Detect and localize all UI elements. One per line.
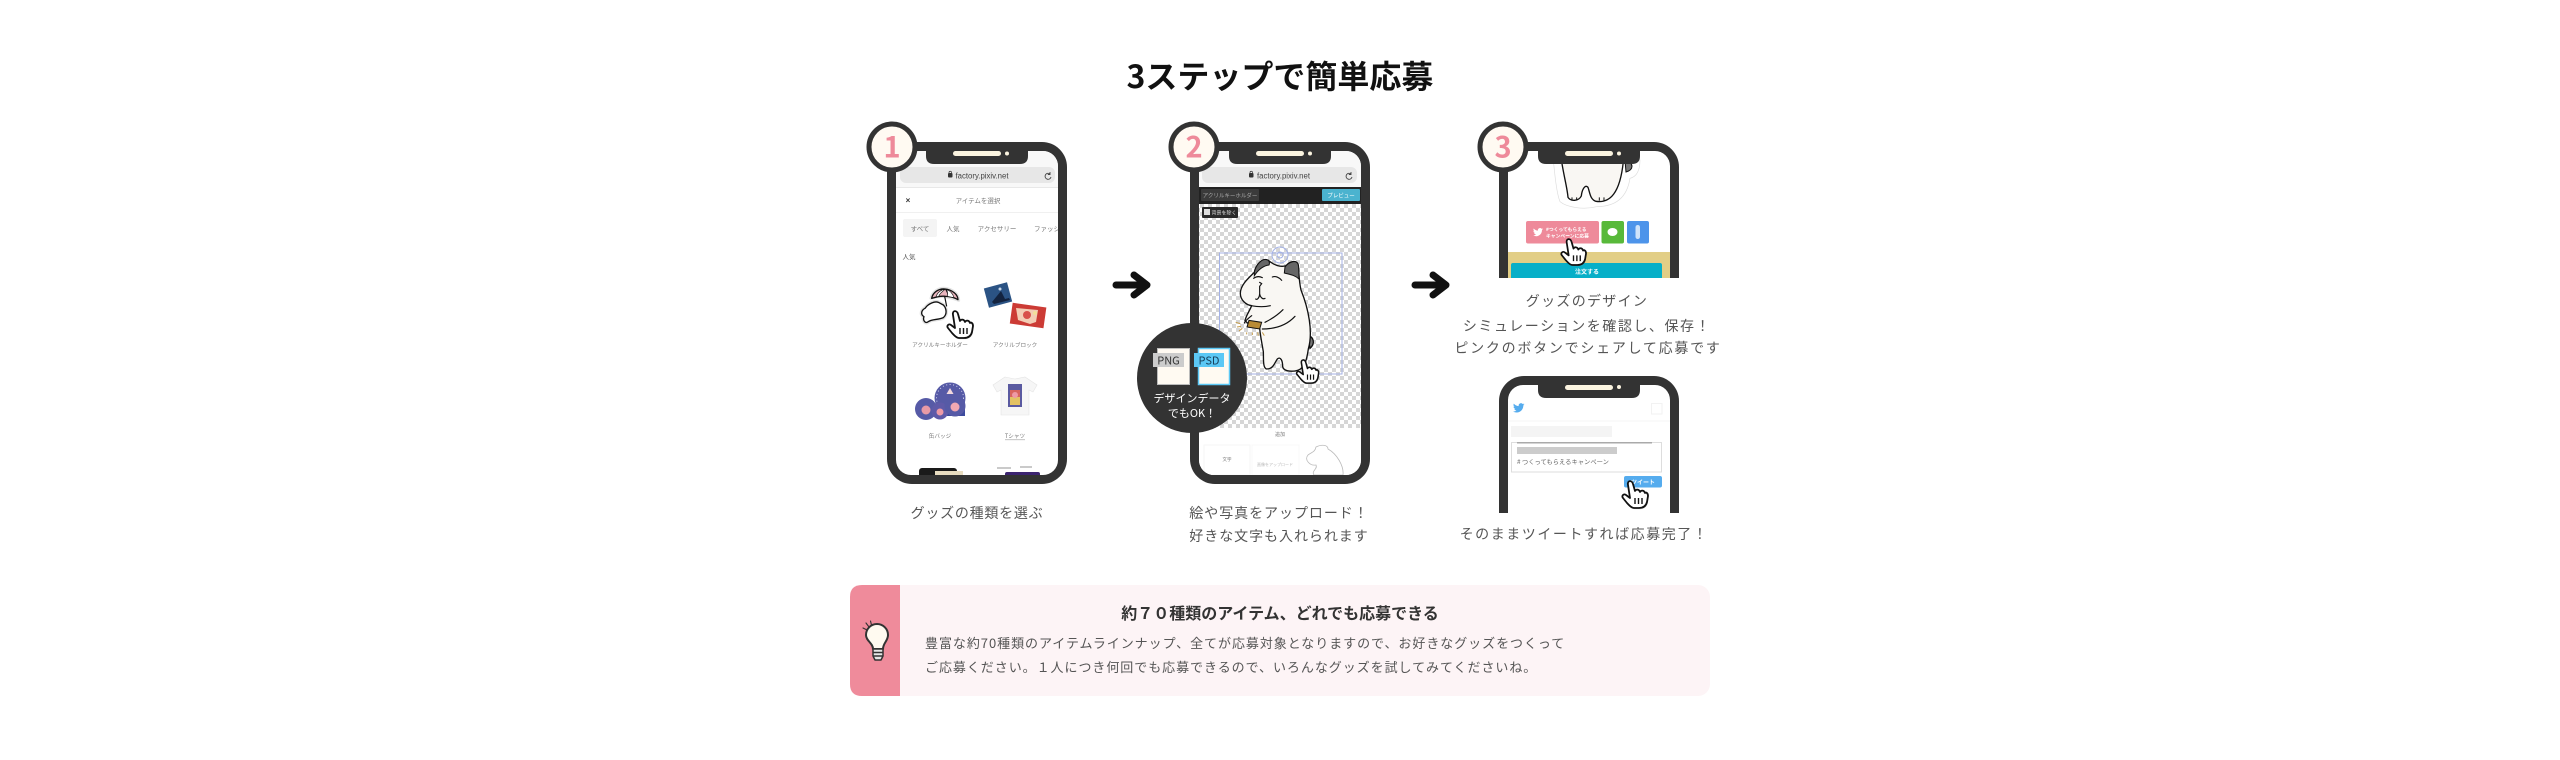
illustration: cat	[1236, 260, 1313, 371]
remove background toggle: 背景を除く	[1211, 210, 1237, 216]
order bar: 注文する	[1575, 267, 1599, 276]
caption 4: そのままツイートすれば応募完了！	[1460, 524, 1708, 544]
share buttons	[1526, 221, 1649, 244]
remove background toggle	[1202, 207, 1238, 218]
panel body: 豊富な約70種類のアイテムラインナップ、全てが応募対象となりますので、お好きなグッズをつくって	[925, 633, 1565, 652]
phone 2 screen content: factory.pixiv.net	[1257, 172, 1311, 180]
caption 2: 絵や写真をアップロード！	[1189, 503, 1369, 523]
caption 3: ピンクのボタンでシェアして応募です	[1454, 338, 1722, 358]
phone 1 screen content: 人気	[902, 251, 916, 261]
title: 3ステップで簡単応募	[1127, 52, 1433, 98]
tweet button: ツイート	[1631, 478, 1655, 486]
phone 1 screen content: アクセサリー	[978, 223, 1016, 233]
callout: design data OK	[1137, 323, 1247, 433]
phone 3: simulation and share	[1499, 142, 1679, 278]
sticker preview	[1553, 160, 1640, 208]
editor toolbar: アクリルキーホルダー	[1203, 192, 1257, 200]
tweet box	[1512, 442, 1662, 472]
caption 2	[1189, 503, 1369, 546]
step badge 3: 3	[1494, 124, 1512, 166]
share buttons: キャンペーンに応募	[1546, 232, 1589, 240]
phone 1 screen content	[896, 151, 1058, 475]
phone 1 screen content: アイテムを選択	[956, 195, 1001, 205]
step badge 3	[1480, 124, 1526, 170]
caption 3: シミュレーションを確認し、保存！	[1463, 316, 1711, 336]
icon: PNG file: PNG	[1157, 352, 1180, 368]
phone 4: tweet	[1499, 376, 1679, 513]
step badge 2	[1171, 124, 1217, 170]
step badge 1: 1	[883, 124, 901, 166]
caption 1: グッズの種類を選ぶ	[911, 503, 1043, 523]
phone 1 screen content: 缶バッジ	[929, 432, 952, 440]
item: phone case (cropped)	[919, 468, 963, 475]
phone 1 screen content: アクリルキーホルダー	[912, 341, 968, 349]
checkerboard canvas	[1199, 204, 1361, 428]
icon: PSD file: PSD	[1199, 352, 1219, 368]
editor toolbar	[1199, 187, 1361, 204]
step badge 2: 2	[1185, 124, 1203, 166]
item: tote (cropped)	[997, 466, 1040, 475]
icon: pointing hand	[1622, 481, 1649, 509]
panel body	[925, 633, 1565, 676]
add panel: 画像をアップロード	[1257, 461, 1293, 468]
phone 1 screen content: factory.pixiv.net	[955, 172, 1009, 180]
phone 2: upload	[1190, 142, 1370, 484]
tweet button	[1624, 476, 1662, 488]
phone 1 notch	[926, 150, 1028, 164]
add panel	[1199, 428, 1361, 475]
callout: design data OK: でもOK！	[1168, 405, 1216, 421]
phone 3 notch	[1538, 151, 1640, 164]
phone 4 notch	[1538, 385, 1640, 398]
icon: pointing hand	[1561, 239, 1587, 266]
panel body: ご応募ください。１人につき何回でも応募できるので、いろんなグッズを試してみてくださいね。	[925, 657, 1537, 676]
phone 1 screen content: 人気	[946, 223, 960, 233]
info panel	[850, 585, 1710, 696]
icon: twitter bird	[1513, 403, 1524, 413]
pink icon strip	[850, 585, 900, 696]
selection box	[1220, 247, 1342, 374]
phone 1 screen content: ×	[906, 196, 911, 205]
icon: pointing hand	[947, 311, 974, 339]
item: t-shirt	[993, 377, 1037, 415]
phone 2 screen content	[1199, 151, 1361, 475]
phone 1 screen content: すべて	[911, 223, 929, 233]
arrow 2	[1415, 275, 1446, 295]
callout: design data OK: デザインデータ	[1154, 390, 1230, 406]
caption 3	[1454, 291, 1722, 358]
phone 1: choose goods type	[887, 142, 1073, 484]
panel heading: 約７０種類のアイテム、どれでも応募できる	[1121, 600, 1439, 624]
phone 2 notch	[1229, 150, 1331, 164]
icon: pointing hand	[1297, 360, 1319, 384]
item: acrylic keychain	[922, 288, 959, 322]
caption 2: 好きな文字も入れられます	[1189, 526, 1369, 546]
editor toolbar: プレビュー	[1327, 192, 1355, 200]
phone 1 screen content: アクリルブロック	[993, 341, 1037, 349]
item: acrylic block	[984, 282, 1046, 328]
icon: light bulb	[863, 621, 888, 660]
item: can badges	[915, 382, 966, 420]
tweet box: # つくってもらえるキャンペーン	[1517, 457, 1609, 466]
phone 1 screen content: Tシャツ	[1005, 432, 1025, 440]
caption 3: グッズのデザイン	[1526, 291, 1648, 311]
order bar	[1508, 252, 1670, 278]
add panel: 追加	[1275, 431, 1285, 438]
add panel: 文字	[1222, 456, 1232, 463]
arrow 1	[1116, 275, 1147, 295]
share buttons: #つくってもらえる	[1546, 226, 1587, 233]
phone 1 screen content: ファッション	[1034, 223, 1073, 233]
step badge 1	[869, 124, 915, 170]
